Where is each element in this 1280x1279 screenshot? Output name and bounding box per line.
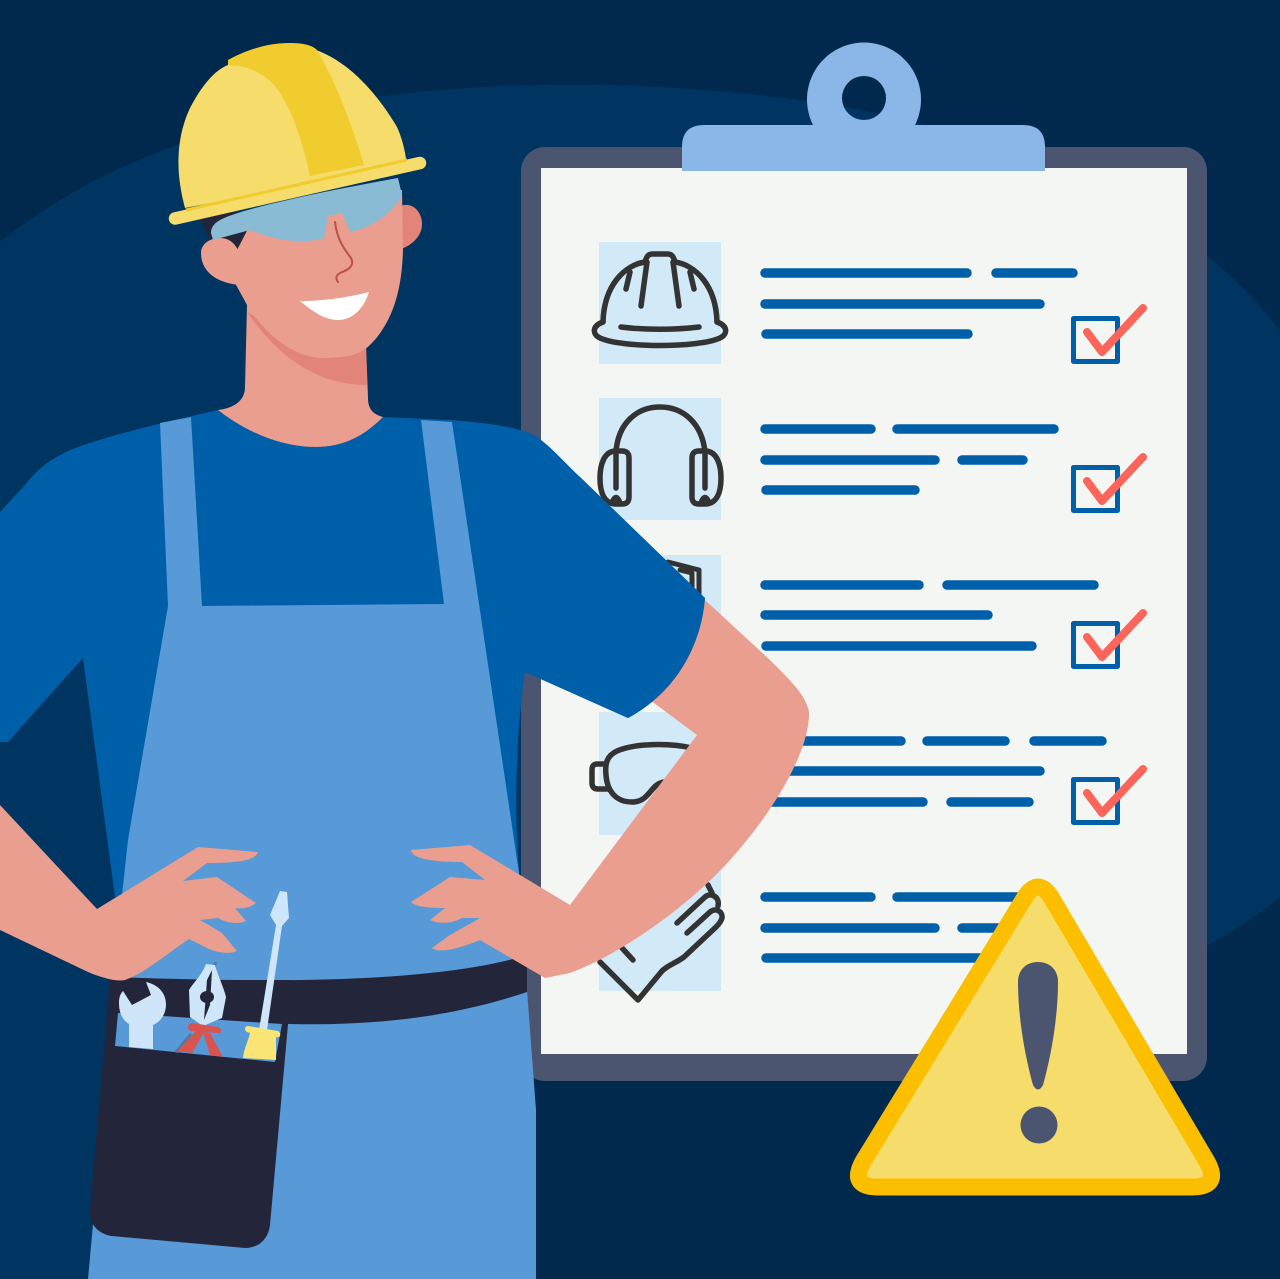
face <box>235 190 403 358</box>
pouch opening <box>115 1013 282 1062</box>
warning triangle <box>858 887 1212 1187</box>
tool belt <box>110 955 527 1024</box>
left ear <box>201 238 241 285</box>
clipboard clip <box>682 43 1045 171</box>
icon tiles <box>599 242 721 991</box>
icon: ear defenders <box>600 407 721 504</box>
hat brim <box>175 163 420 218</box>
hair <box>198 205 252 251</box>
checklist text lines <box>765 273 1102 958</box>
tool: screwdriver <box>243 891 289 1060</box>
apron <box>88 417 536 1279</box>
hard hat <box>175 43 420 218</box>
shirt <box>0 410 705 897</box>
safety glasses <box>211 178 402 241</box>
nose <box>335 222 352 282</box>
right arm and hand <box>411 600 809 978</box>
tool: pliers <box>174 962 226 1057</box>
icon: glove <box>600 885 722 1000</box>
clipboard board <box>521 147 1207 1081</box>
icon: hard hat <box>594 254 726 346</box>
checkboxes <box>1074 308 1143 822</box>
neck <box>218 305 383 447</box>
hat centre ridge <box>228 43 364 176</box>
left arm and hand <box>0 805 258 980</box>
icon: partly hidden third item <box>668 562 699 596</box>
paper sheet <box>541 168 1187 1054</box>
shirt sleeve <box>525 450 705 718</box>
exclamation mark <box>1018 962 1058 1090</box>
tool pouch <box>90 980 292 1248</box>
worker <box>0 43 809 1279</box>
neck shadow <box>247 312 367 385</box>
icon: goggles <box>592 745 692 802</box>
tool: wrench <box>119 982 166 1049</box>
right ear <box>398 205 422 250</box>
clipboard <box>521 43 1207 1081</box>
smile <box>300 292 369 320</box>
